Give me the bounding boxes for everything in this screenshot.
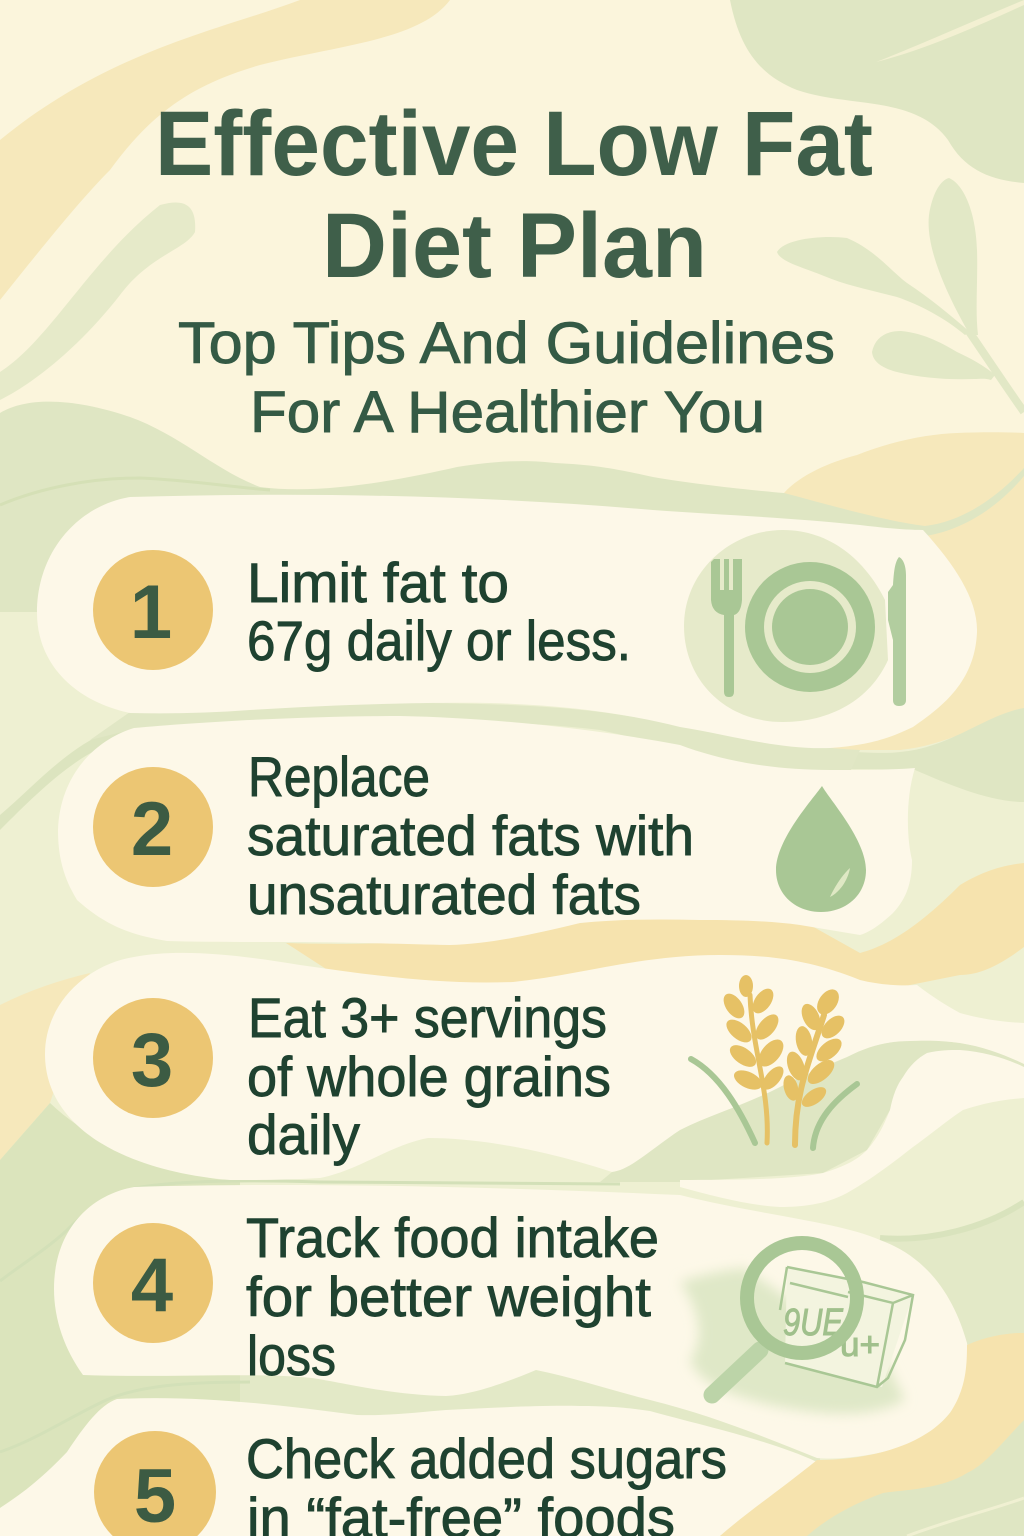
icon: magnifier over food label: 9UE <box>783 1302 844 1344</box>
tip 5 <box>94 1427 727 1536</box>
number badge 4: 4 <box>131 1243 173 1328</box>
icon: plate and cutlery <box>684 530 906 722</box>
icon: magnifier over food label <box>680 1243 913 1414</box>
number badge 1: 1 <box>130 570 172 655</box>
title: Effective Low Fat <box>155 93 873 195</box>
card 3 background <box>45 953 1024 1207</box>
tip 4 text: Track food intake <box>246 1206 659 1269</box>
tip 3 text <box>247 986 611 1166</box>
tip 4 <box>93 1206 913 1414</box>
tip 4 text: for better weight <box>246 1265 651 1328</box>
card 2 background <box>58 716 915 945</box>
tip 1 text: Limit fat to <box>247 551 509 614</box>
icon: wheat <box>691 975 857 1148</box>
tip 2 text: unsaturated fats <box>247 863 641 926</box>
number badge 2 <box>93 767 213 887</box>
tip 4 text <box>246 1206 659 1387</box>
tip 5 text <box>246 1427 727 1536</box>
number badge 1 <box>93 550 213 670</box>
subtitle: Top Tips And Guidelines <box>178 311 835 376</box>
tip 2 <box>93 745 866 926</box>
tip 3 text: Eat 3+ servings <box>248 986 607 1049</box>
tip 1 <box>93 530 906 722</box>
number badge 5 <box>94 1431 216 1536</box>
card 4 background <box>54 1185 968 1459</box>
tip 5 text: Check added sugars <box>246 1427 727 1490</box>
number badge 3: 3 <box>131 1018 173 1103</box>
tip 3 text: of whole grains <box>247 1045 611 1108</box>
number badge 2: 2 <box>131 787 173 872</box>
tip 3 text: daily <box>247 1103 360 1166</box>
card 5 background <box>0 1398 817 1536</box>
tip 2 text: saturated fats with <box>247 804 694 867</box>
title: Diet Plan <box>322 195 707 297</box>
tip 2 text <box>247 745 694 926</box>
icon: oil drop <box>776 786 866 912</box>
subtitle <box>178 311 835 445</box>
tip 4 text: loss <box>247 1324 336 1387</box>
tip 2 text: Replace <box>248 745 430 808</box>
card 1 background <box>37 495 977 748</box>
tip 1 text: 67g daily or less. <box>247 609 631 672</box>
subtitle: For A Healthier You <box>250 380 765 445</box>
number badge 3 <box>93 998 213 1118</box>
tip 1 text <box>247 551 631 672</box>
green stem stripe <box>880 1202 1024 1239</box>
title <box>155 93 873 297</box>
number badge 4 <box>93 1223 213 1343</box>
bottom right corner shapes <box>720 1333 1024 1536</box>
tip 3 <box>93 975 857 1166</box>
icon: magnifier over food label: u+ <box>840 1326 880 1364</box>
